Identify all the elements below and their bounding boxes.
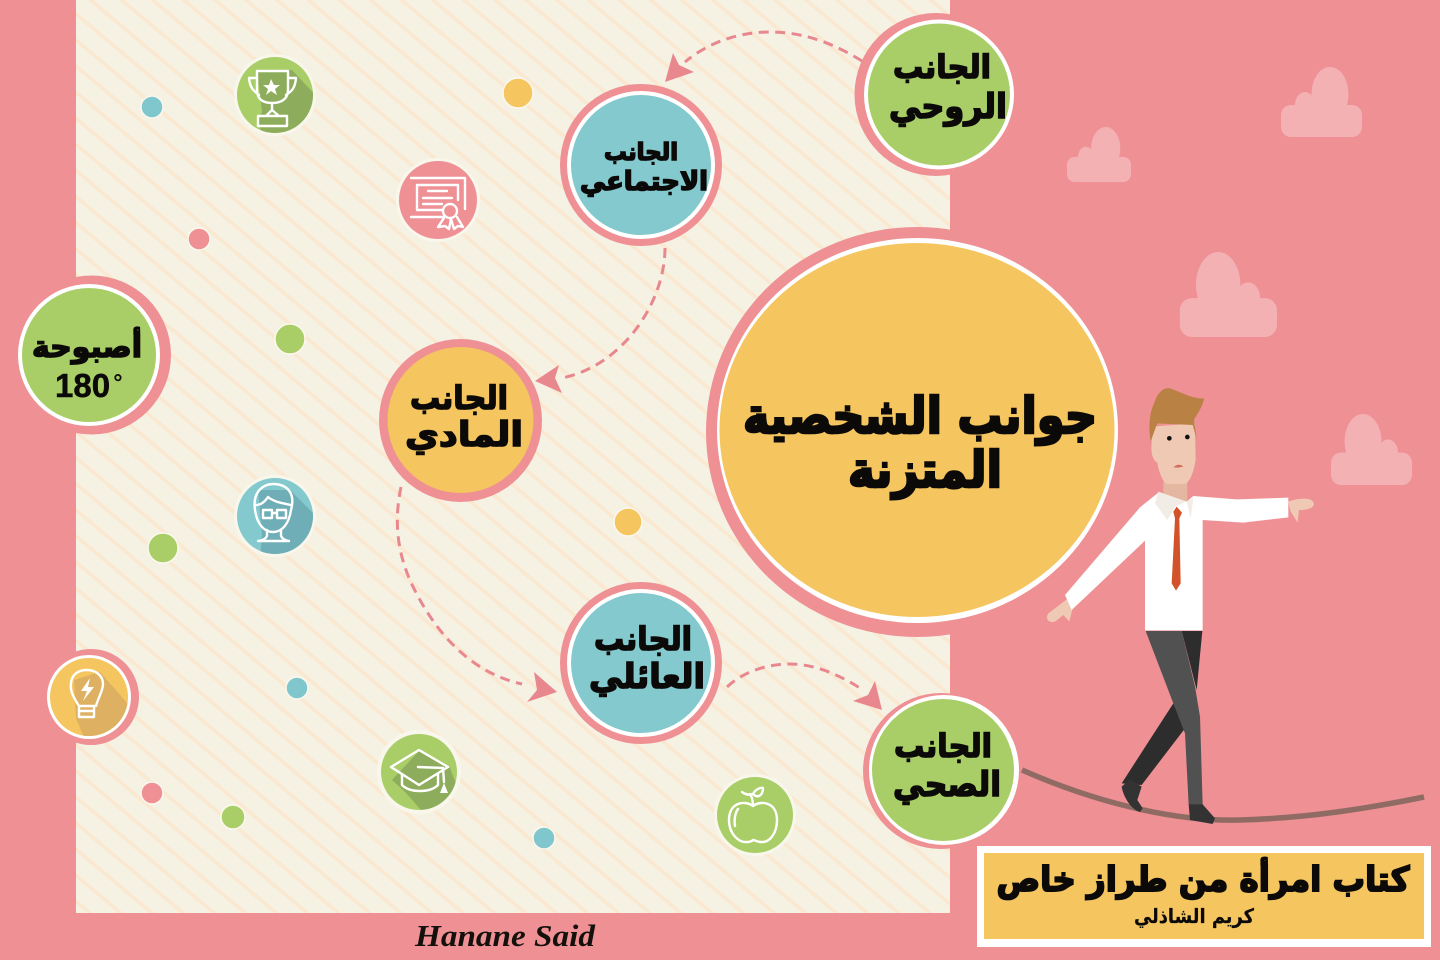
main title: المتزنة bbox=[848, 441, 1002, 500]
node: Osbouha 180: 180 bbox=[55, 367, 110, 404]
rope bbox=[1022, 770, 1424, 820]
shirt bbox=[1065, 493, 1288, 630]
arrow: social to material bbox=[535, 248, 665, 393]
node: family aspect: الجانب bbox=[594, 620, 692, 658]
node: Osbouha 180: أصبوحة bbox=[32, 327, 142, 365]
eyes and mouth bbox=[1167, 435, 1190, 468]
icon: graduation cap bbox=[378, 732, 460, 812]
icon: apple bbox=[714, 774, 796, 856]
icon: certificate bbox=[396, 158, 480, 242]
neck bbox=[1163, 478, 1187, 503]
signature: Hanane Said bbox=[414, 918, 596, 953]
decorative dots bbox=[141, 78, 642, 849]
icon: man with glasses bbox=[234, 476, 315, 556]
front shoe bbox=[1189, 804, 1215, 824]
right hand bbox=[1288, 499, 1314, 523]
node: family aspect bbox=[560, 582, 722, 744]
trousers front leg bbox=[1146, 631, 1203, 805]
hair bbox=[1149, 388, 1204, 442]
node: family aspect: العائلي bbox=[589, 657, 705, 697]
cloud 1 bbox=[1281, 67, 1362, 137]
cloud 3 bbox=[1180, 252, 1277, 337]
node: Osbouha 180 bbox=[12, 276, 171, 434]
cloud 4 bbox=[1331, 414, 1412, 485]
node: spiritual aspect: الجانب bbox=[893, 48, 991, 86]
node: material aspect: المادي bbox=[405, 415, 523, 455]
node: social aspect: الاجتماعي bbox=[580, 167, 708, 197]
collar bbox=[1155, 492, 1193, 520]
arrow: material to family bbox=[397, 487, 557, 702]
cloud 2 bbox=[1067, 127, 1131, 182]
arrow: spiritual to social bbox=[665, 32, 862, 82]
node: social aspect: الجانب bbox=[604, 138, 678, 166]
left hand bbox=[1047, 599, 1073, 622]
arrow: family to health bbox=[727, 664, 882, 710]
node: health aspect: الصحي bbox=[893, 765, 1001, 805]
node: health aspect: الجانب bbox=[894, 727, 992, 765]
node: health aspect bbox=[863, 693, 1019, 849]
book title box bbox=[977, 846, 1431, 947]
man walking on tightrope bbox=[1047, 388, 1314, 824]
main title bbox=[743, 387, 1097, 500]
trousers back top bbox=[1182, 631, 1202, 690]
icon: trophy bbox=[234, 54, 315, 136]
tie bbox=[1172, 507, 1182, 591]
main circle bbox=[706, 227, 1128, 637]
node: Osbouha 180: ° bbox=[113, 370, 123, 397]
back shoe bbox=[1122, 779, 1143, 812]
trousers back leg bbox=[1122, 703, 1185, 785]
icon: light bulb bbox=[43, 649, 139, 750]
book title: كتاب امرأة من طراز خاص bbox=[996, 857, 1410, 900]
node: spiritual aspect bbox=[854, 13, 1018, 176]
main title: جوانب الشخصية bbox=[743, 387, 1097, 446]
striped cream panel bbox=[76, 0, 950, 913]
face bbox=[1151, 423, 1196, 484]
node: spiritual aspect: الروحي bbox=[889, 87, 1007, 127]
node: material aspect: الجانب bbox=[410, 379, 508, 417]
node: material aspect bbox=[379, 339, 542, 502]
author: كريم الشاذلي bbox=[1134, 904, 1254, 929]
node: social aspect bbox=[560, 84, 722, 246]
